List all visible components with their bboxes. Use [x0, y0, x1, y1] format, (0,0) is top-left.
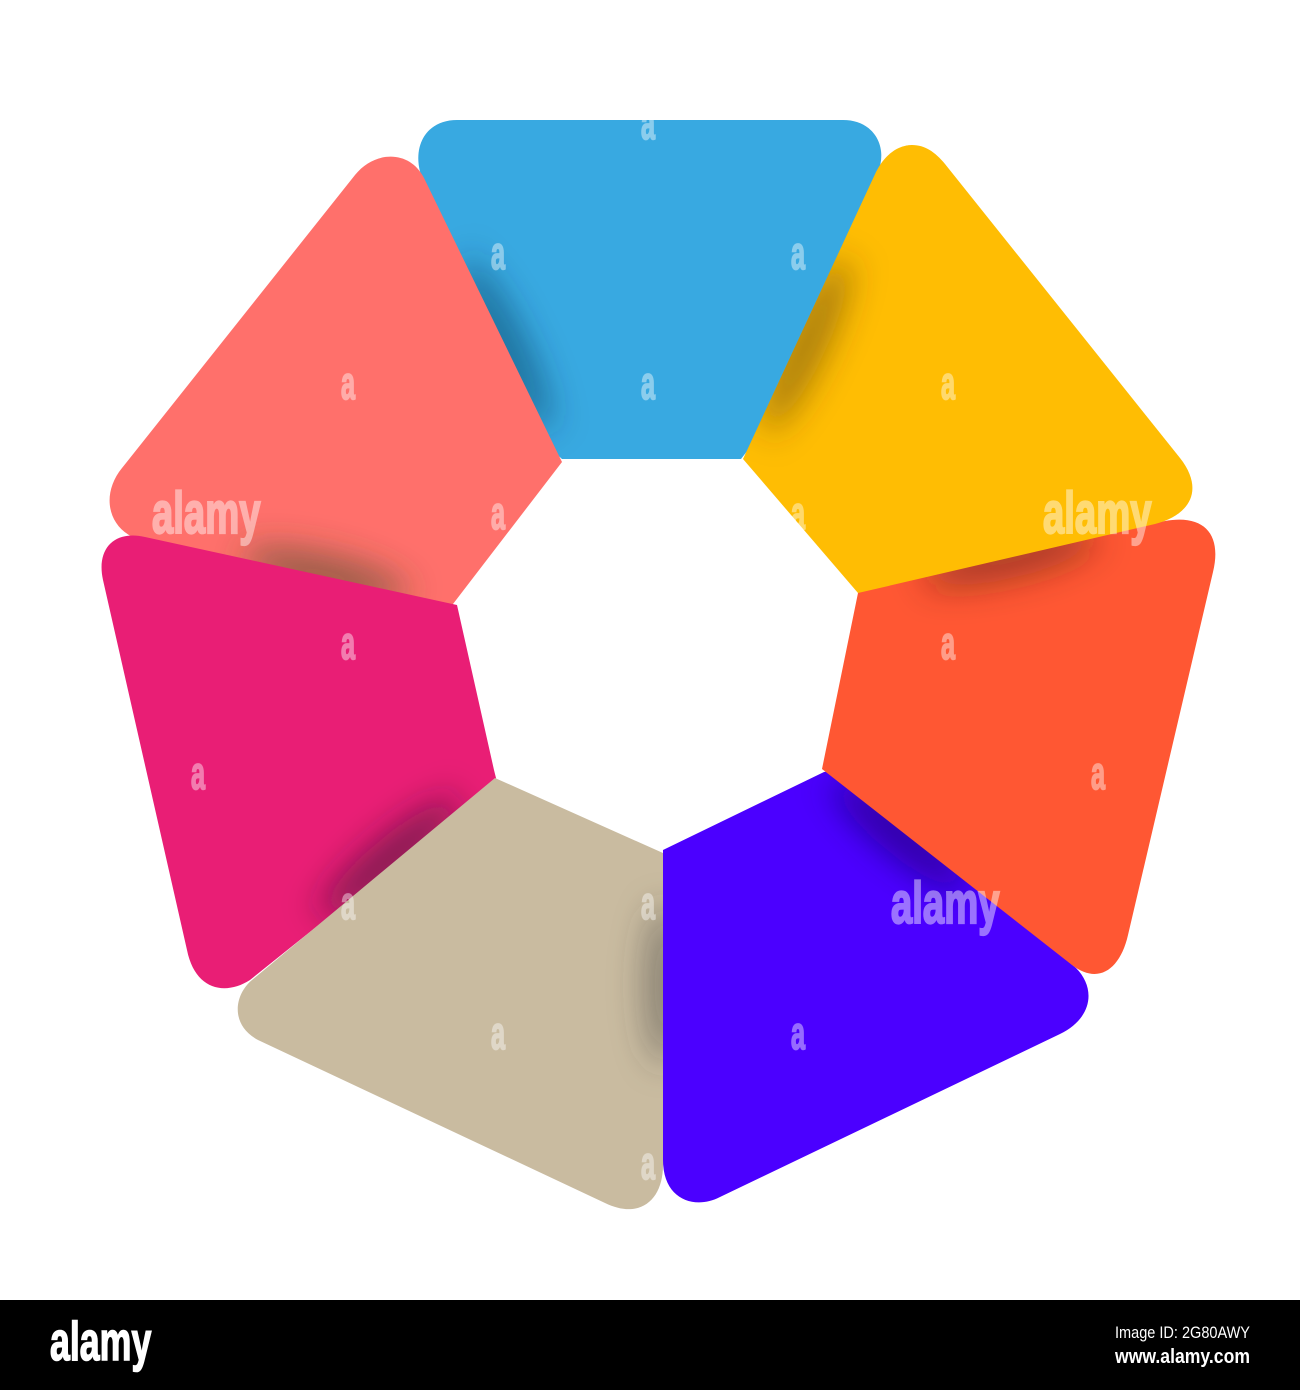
watermark: alamy words — [152, 482, 1152, 936]
watermark: small repeated a marks: a — [641, 357, 655, 409]
watermark: alamy words: alamy — [152, 482, 261, 546]
watermark: small repeated a marks: a — [641, 1137, 655, 1189]
watermark: small repeated a marks: a — [341, 357, 355, 409]
watermark: small repeated a marks: a — [641, 877, 655, 929]
footer bar — [0, 1300, 1300, 1390]
segment: coral upper left — [110, 157, 562, 614]
watermark: small repeated a marks: a — [791, 227, 805, 279]
watermark: small repeated a marks: a — [791, 487, 805, 539]
segment: blue top — [418, 120, 881, 459]
segment: magenta left — [102, 535, 497, 988]
watermark: small repeated a marks: a — [341, 617, 355, 669]
watermark: small repeated a marks: a — [491, 227, 505, 279]
watermark: alamy words: alamy — [891, 872, 1000, 936]
watermark: small repeated a marks: a — [941, 617, 955, 669]
watermark: small repeated a marks: a — [1091, 747, 1105, 799]
watermark: small repeated a marks: a — [791, 1007, 805, 1059]
watermark: small repeated a marks: a — [191, 747, 205, 799]
watermark: small repeated a marks: a — [491, 1007, 505, 1059]
watermark: alamy words: alamy — [1043, 482, 1152, 546]
watermark: small repeated a marks: a — [641, 97, 655, 149]
segment: orange right — [822, 518, 1215, 974]
segment: yellow upper right — [743, 145, 1192, 593]
watermark: small repeated a marks: a — [941, 357, 955, 409]
footer logo: alamy — [50, 1310, 152, 1372]
watermark: small repeated a marks: a — [341, 877, 355, 929]
website: www.alamy.com — [1114, 1346, 1250, 1368]
watermark: small repeated a marks: a — [491, 487, 505, 539]
segment: beige bottom left — [238, 778, 684, 1209]
segment: purple bottom right — [663, 766, 1089, 1202]
watermark: small repeated a marks — [191, 97, 1105, 1189]
image id: Image ID: 2G80AWY — [1115, 1323, 1250, 1342]
